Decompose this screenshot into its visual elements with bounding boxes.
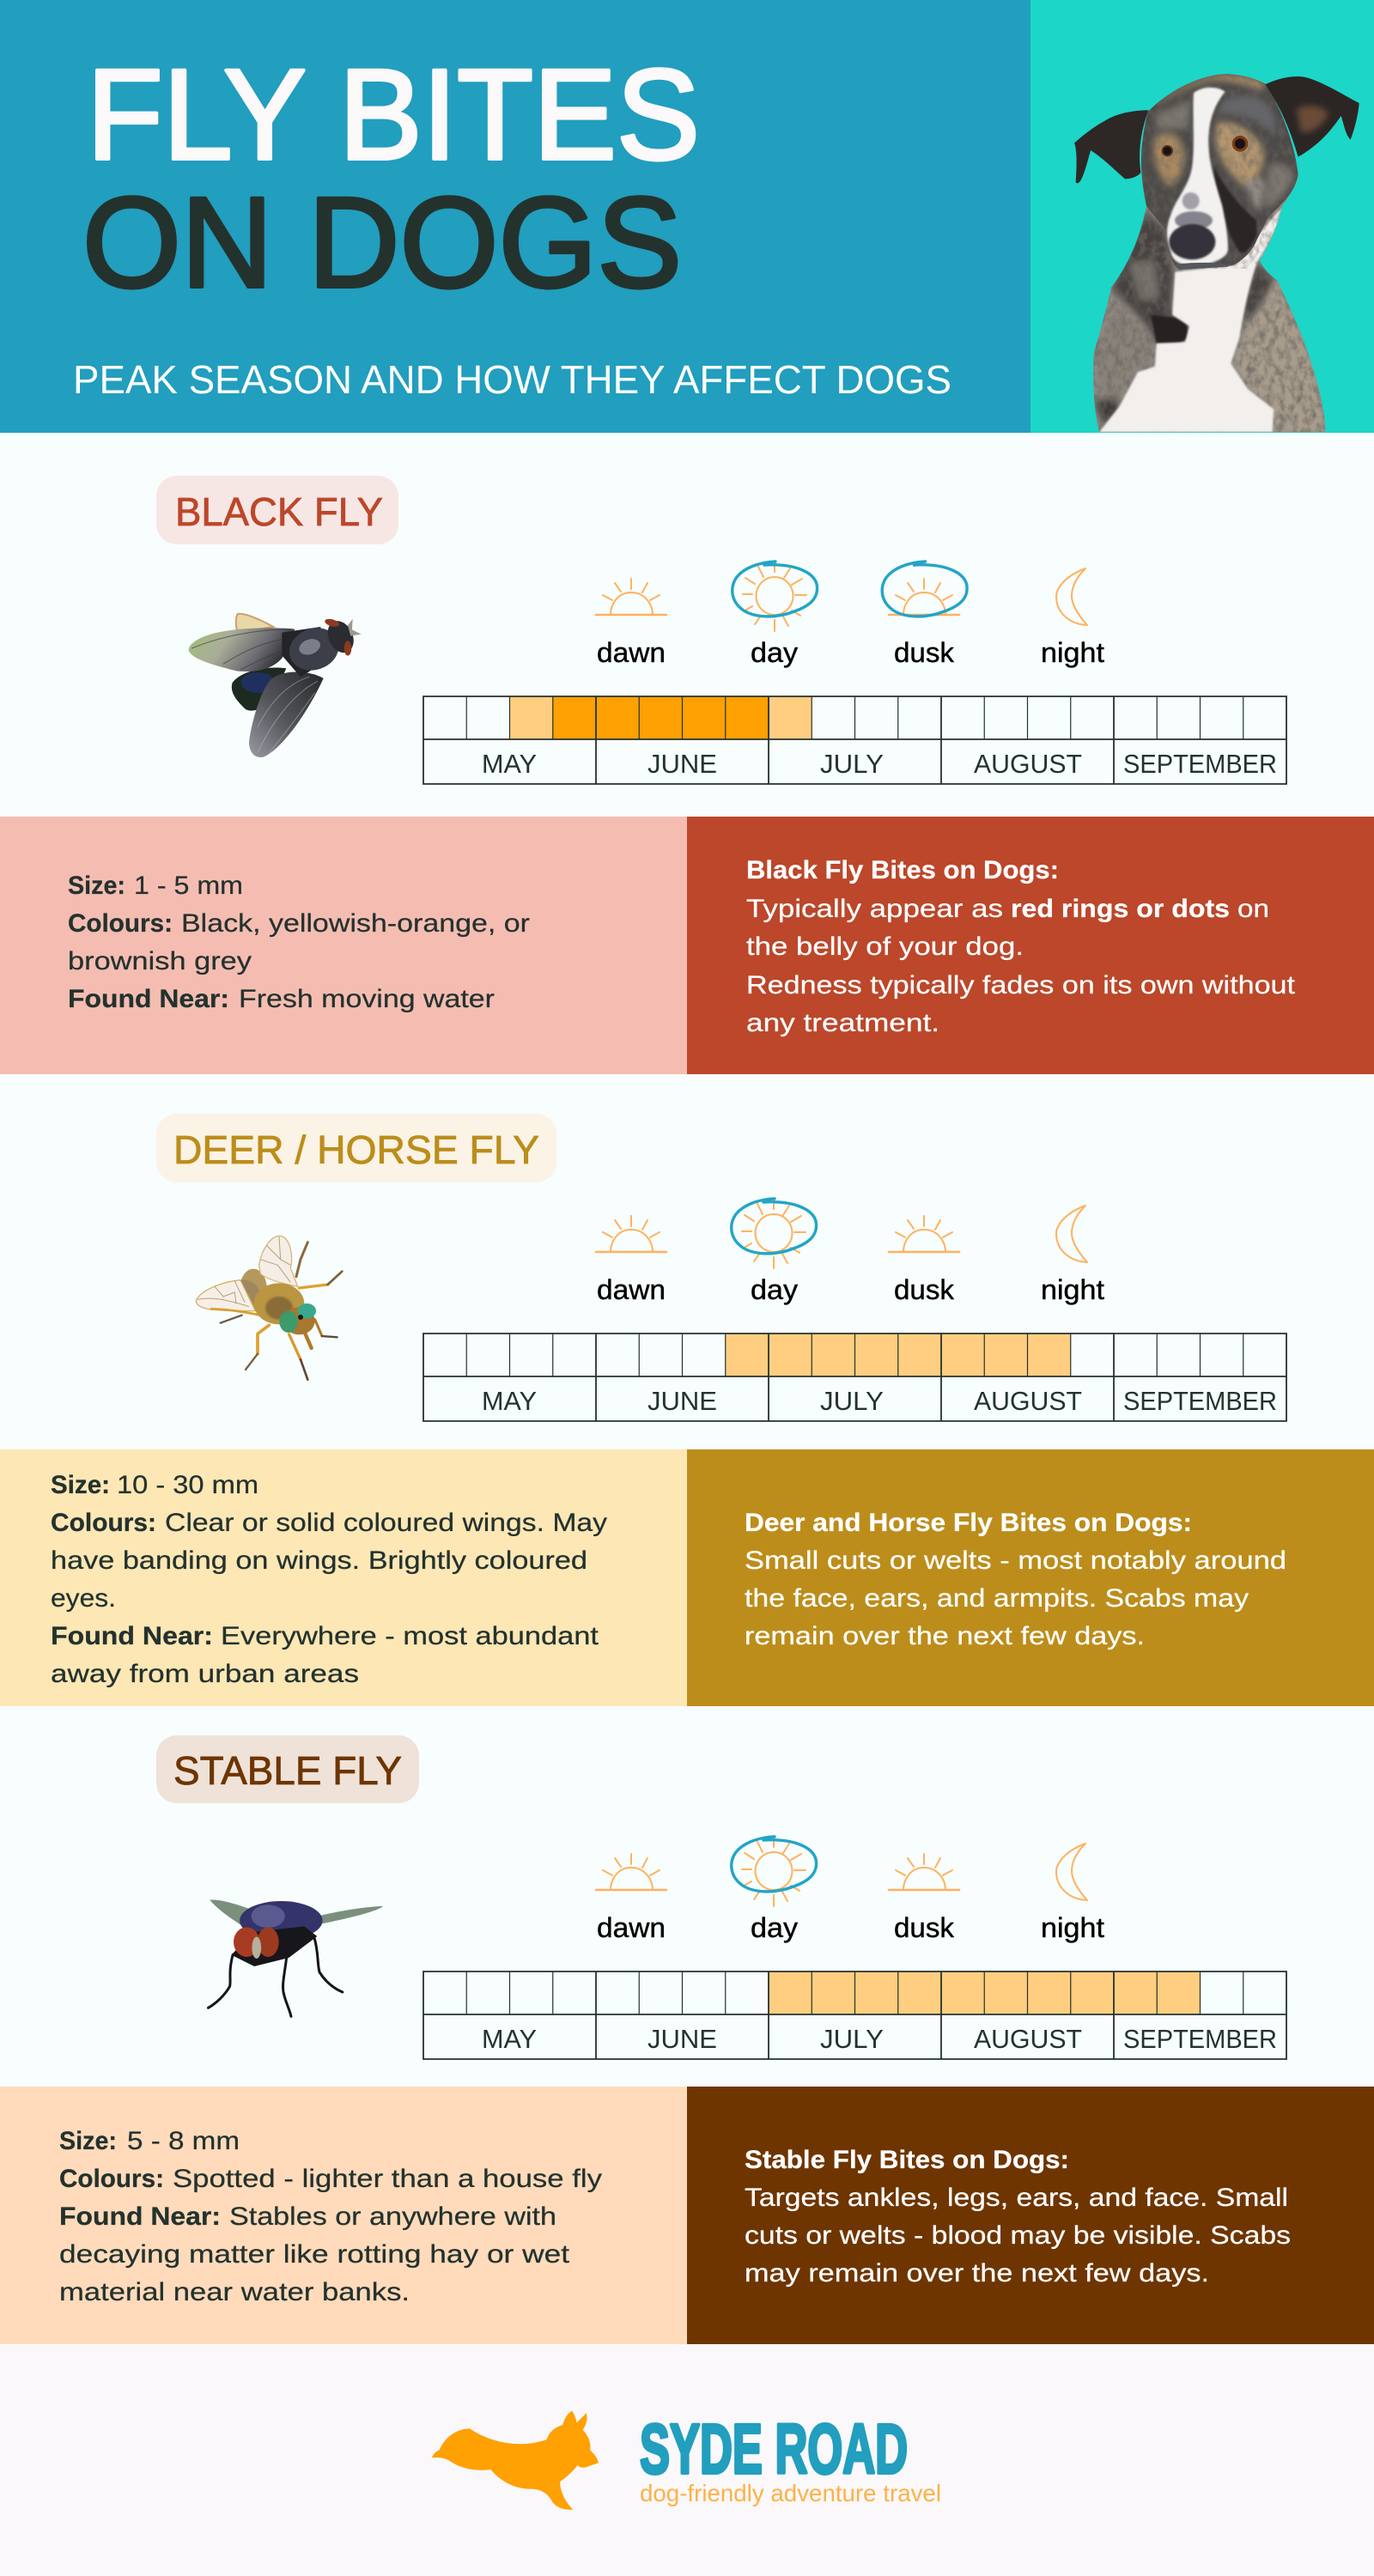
panel: black fly bites: Redness typically fades on its own without xyxy=(746,971,1296,999)
panel: stable fly bites: Stable Fly Bites on Dogs: xyxy=(745,2146,1069,2174)
section: stable fly xyxy=(0,1735,1374,2344)
time of day labels: night xyxy=(1041,637,1104,668)
footer background xyxy=(0,2344,1374,2576)
panel: black fly facts xyxy=(0,817,687,1074)
panel: deer horse fly facts: 10 - 30 mm xyxy=(117,1471,258,1499)
panel: stable fly facts: Colours: xyxy=(59,2165,164,2193)
panel: stable fly facts: 5 - 8 mm xyxy=(127,2127,240,2155)
heading pill: deer horse fly: DEER / HORSE FLY xyxy=(173,1127,539,1172)
time of day labels xyxy=(597,1274,1104,1305)
time of day labels: dawn xyxy=(597,637,666,668)
icon: night xyxy=(1056,1206,1087,1262)
season chart: black fly: SEPTEMBER xyxy=(1123,749,1277,779)
time of day icons xyxy=(596,1837,1087,1906)
panel: deer horse fly bites: Small cuts or welts - most notably around xyxy=(745,1546,1286,1575)
time of day labels: dawn xyxy=(597,1274,666,1305)
panel: stable fly facts: Stables or anywhere with xyxy=(229,2202,556,2231)
panel: deer horse fly facts: have banding on wings. Brightly coloured xyxy=(51,1546,587,1575)
icon: black fly insect xyxy=(189,614,362,757)
panel: deer horse fly facts xyxy=(0,1449,687,1706)
season chart: stable fly: AUGUST xyxy=(974,2024,1082,2054)
heading pill: stable fly: STABLE FLY xyxy=(173,1748,402,1793)
panel: black fly bites: the belly of your dog. xyxy=(746,933,1024,961)
season chart: deer horse fly: JUNE xyxy=(647,1386,717,1416)
panel: black fly bites: any treatment. xyxy=(746,1009,939,1037)
panel: stable fly facts: Spotted - lighter than a house fly xyxy=(173,2165,602,2193)
panel: deer horse fly facts: Colours: xyxy=(51,1509,156,1537)
panel: deer horse fly facts: eyes. xyxy=(51,1584,116,1613)
season chart: deer horse fly xyxy=(423,1334,1286,1421)
dog illustration xyxy=(1074,69,1359,432)
panel: deer horse fly facts: Everywhere - most abundant xyxy=(221,1622,599,1650)
panel: stable fly facts: Size: xyxy=(59,2127,117,2155)
logo tagline: dog-friendly adventure travel xyxy=(640,2480,941,2506)
time of day labels: dusk xyxy=(894,1274,955,1305)
panel: stable fly bites: Targets ankles, legs, ears, and face. Small xyxy=(745,2184,1288,2212)
header teal panel xyxy=(1030,0,1374,433)
season chart: deer horse fly: AUGUST xyxy=(974,1386,1082,1416)
title line one: FLY BITES xyxy=(87,42,700,186)
panel: deer horse fly bites: the face, ears, and armpits. Scabs may xyxy=(745,1584,1249,1613)
time of day labels: day xyxy=(751,1274,798,1305)
icon: dawn xyxy=(596,1216,666,1252)
icon: dusk with ring xyxy=(882,562,967,617)
icon: night xyxy=(1056,568,1087,625)
panel: stable fly bites: cuts or welts - blood may be visible. Scabs xyxy=(745,2221,1291,2250)
time of day labels: dusk xyxy=(894,1912,955,1943)
icon: day with ring xyxy=(733,562,818,631)
time of day icons xyxy=(596,562,1087,631)
season chart: black fly: MAY xyxy=(482,749,537,779)
panel: black fly facts: brownish grey xyxy=(68,947,252,975)
panel: deer horse fly facts: Size: xyxy=(51,1471,110,1499)
season chart: stable fly: MAY xyxy=(482,2024,537,2054)
panel: black fly facts: Black, yellowish-orange, or xyxy=(181,909,530,938)
season chart: deer horse fly: SEPTEMBER xyxy=(1123,1386,1277,1416)
logo wordmark: SYDE ROAD xyxy=(640,2410,908,2488)
icon: day with ring xyxy=(732,1199,817,1268)
season chart: stable fly: SEPTEMBER xyxy=(1123,2024,1277,2054)
icon: dusk xyxy=(889,1216,959,1252)
panel: deer horse fly facts: Clear or solid coloured wings. May xyxy=(165,1509,607,1537)
season chart: black fly xyxy=(423,696,1286,784)
panel: black fly bites: on xyxy=(1237,895,1269,923)
panel: stable fly facts: material near water banks. xyxy=(59,2278,410,2306)
time of day labels xyxy=(597,637,1104,668)
panel: stable fly facts xyxy=(0,2087,687,2344)
season chart: deer horse fly: MAY xyxy=(482,1386,537,1416)
time of day labels: night xyxy=(1041,1912,1104,1943)
season chart: stable fly xyxy=(423,1971,1286,2059)
panel: deer horse fly facts: Found Near: xyxy=(51,1622,213,1650)
heading pill: deer horse fly xyxy=(156,1114,556,1182)
panel: deer horse fly bites: remain over the next few days. xyxy=(745,1622,1145,1650)
subtitle: PEAK SEASON AND HOW THEY AFFECT DOGS xyxy=(73,357,951,402)
panel: black fly facts: Colours: xyxy=(68,909,173,938)
section: black fly xyxy=(0,476,1374,1074)
icon: running dog logo xyxy=(432,2411,599,2510)
header banner xyxy=(0,0,1374,433)
season chart: deer horse fly: JULY xyxy=(820,1386,884,1416)
panel: black fly bites: Typically appear as xyxy=(746,895,1003,923)
panel: stable fly bites: may remain over the next few days. xyxy=(745,2259,1209,2287)
panel: deer horse fly bites xyxy=(687,1449,1374,1706)
footer xyxy=(0,2344,1374,2576)
icon: dawn xyxy=(596,579,666,615)
panel: stable fly facts: decaying matter like rotting hay or wet xyxy=(59,2240,570,2269)
title line two: ON DOGS xyxy=(82,170,682,314)
icon: stable fly insect xyxy=(209,1900,383,2016)
time of day labels: night xyxy=(1041,1274,1104,1305)
panel: deer horse fly bites: Deer and Horse Fly Bites on Dogs: xyxy=(745,1509,1192,1537)
season chart: stable fly: JULY xyxy=(820,2024,884,2054)
panel: stable fly facts: Found Near: xyxy=(59,2202,221,2231)
heading pill: stable fly xyxy=(156,1735,419,1803)
panel: black fly facts: Found Near: xyxy=(68,985,229,1013)
panel: black fly facts: 1 - 5 mm xyxy=(134,872,243,900)
panel: black fly facts: Size: xyxy=(68,872,125,900)
time of day labels: dawn xyxy=(597,1912,666,1943)
icon: day with ring xyxy=(732,1837,817,1906)
time of day labels: dusk xyxy=(894,637,955,668)
heading pill: black fly xyxy=(156,476,398,544)
icon: dusk xyxy=(889,1854,959,1890)
header blue panel xyxy=(0,0,1030,433)
time of day icons xyxy=(596,1199,1087,1268)
panel: black fly bites: red rings or dots xyxy=(1011,895,1230,923)
icon: deer fly insect xyxy=(196,1236,342,1380)
season chart: black fly: JUNE xyxy=(647,749,717,779)
panel: black fly bites xyxy=(687,817,1374,1074)
panel: black fly bites: Black Fly Bites on Dogs: xyxy=(746,856,1059,884)
time of day labels: day xyxy=(751,637,798,668)
panel: stable fly bites xyxy=(687,2087,1374,2344)
section: deer and horse fly xyxy=(0,1114,1374,1706)
icon: dawn xyxy=(596,1854,666,1890)
season chart: black fly: JULY xyxy=(820,749,884,779)
time of day labels: day xyxy=(751,1912,798,1943)
panel: black fly facts: Fresh moving water xyxy=(239,985,495,1013)
panel: deer horse fly facts: away from urban areas xyxy=(51,1660,359,1688)
icon: night xyxy=(1056,1844,1087,1900)
season chart: stable fly: JUNE xyxy=(647,2024,717,2054)
heading pill: black fly: BLACK FLY xyxy=(175,489,383,534)
time of day labels xyxy=(597,1912,1104,1943)
season chart: black fly: AUGUST xyxy=(974,749,1082,779)
